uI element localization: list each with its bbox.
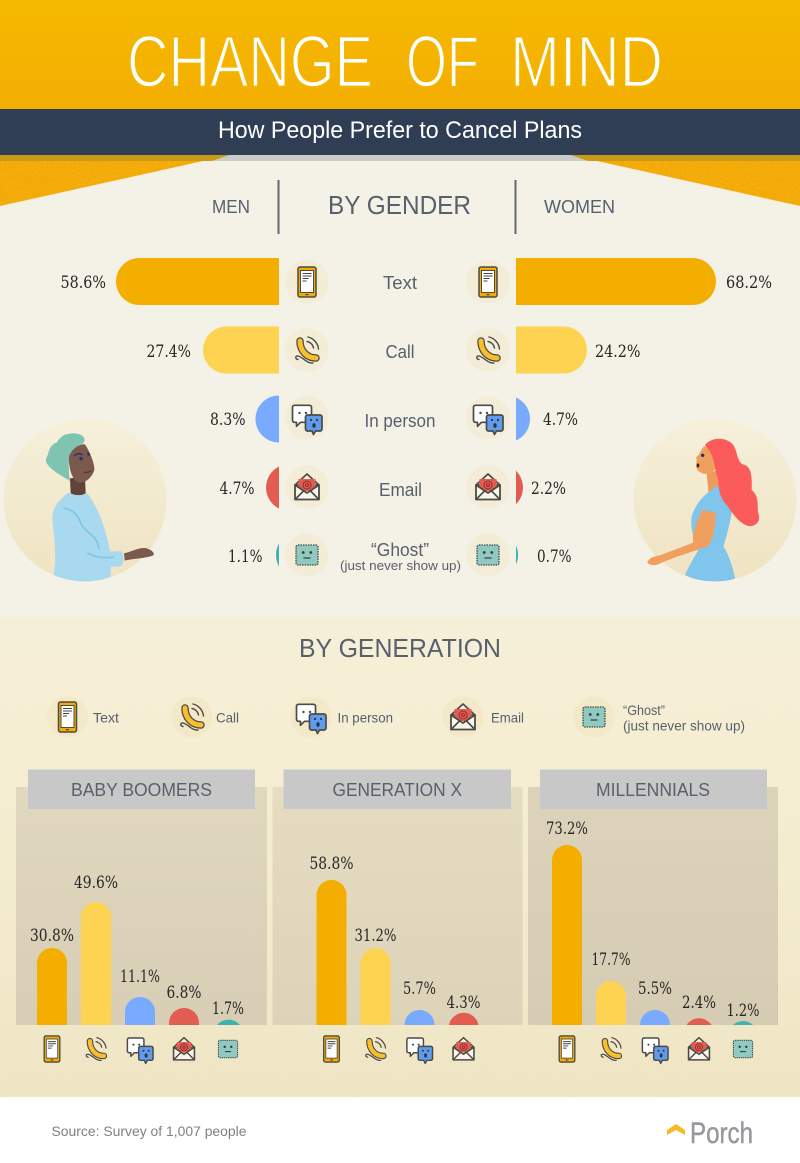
- icon: women text: [479, 267, 497, 297]
- band shadow: [0, 155, 800, 161]
- values: gen x: 4.3%: [446, 993, 480, 1013]
- icon: men text: [298, 267, 316, 297]
- illustration: man: [0, 418, 170, 585]
- bottom icons: millennials: [559, 1036, 753, 1063]
- legend: email: [442, 696, 524, 738]
- bar: men ghost: [276, 544, 279, 566]
- values: millennials: 2.4%: [682, 993, 716, 1013]
- values: millennials: [546, 819, 760, 1021]
- value: women in person: 4.7%: [543, 410, 578, 430]
- values: boomers: 1.7%: [212, 999, 244, 1019]
- tab: baby boomers: BABY BOOMERS: [71, 779, 212, 800]
- panel: baby boomers: [16, 770, 267, 1025]
- values: boomers: [30, 873, 244, 1019]
- value: women call: 24.2%: [595, 342, 640, 362]
- values: gen x: 5.7%: [403, 979, 436, 999]
- bar: women in person: [516, 398, 530, 440]
- tab: generation x: GENERATION X: [332, 779, 462, 800]
- divider right: [514, 180, 516, 234]
- value: men in person: 8.3%: [210, 410, 246, 430]
- legend: call: [172, 696, 239, 738]
- icon: women call: [477, 337, 500, 363]
- subtitle: How People Prefer to Cancel Plans: [218, 117, 582, 144]
- values: gen x: [310, 854, 480, 1013]
- men chart: [60, 258, 279, 567]
- bar: women text: [516, 258, 716, 305]
- header yellow band: [0, 0, 800, 109]
- value: women email: 2.2%: [531, 479, 566, 499]
- panel: generation x: [272, 770, 522, 1025]
- label: ghost: “Ghost”: [371, 540, 429, 560]
- label: email: Email: [379, 480, 422, 500]
- legend: call: Call: [216, 710, 239, 726]
- heading: by gender: BY GENDER: [328, 190, 471, 220]
- bar: millennials ghost: [733, 1021, 753, 1025]
- icon: men call: [296, 337, 318, 363]
- header left orange wedge: [0, 155, 230, 206]
- label: ghost: [340, 540, 461, 573]
- tab: millennials: MILLENNIALS: [596, 779, 710, 800]
- legend: text: [47, 696, 119, 738]
- logo: porch: Porch: [690, 1117, 753, 1150]
- section background: by generation: [0, 617, 800, 1097]
- bar: boomers in person: [125, 997, 155, 1025]
- divider left: [278, 180, 280, 234]
- legend: in person: [290, 696, 393, 738]
- bar: men call: [203, 326, 279, 374]
- values: boomers: 6.8%: [166, 983, 202, 1003]
- values: millennials: 73.2%: [546, 819, 588, 839]
- bar: gen x in person: [404, 1010, 434, 1025]
- bar: women call: [516, 326, 587, 374]
- bar: gen x text: [316, 880, 346, 1025]
- bar: women ghost: [516, 546, 518, 564]
- values: boomers: 11.1%: [120, 967, 160, 987]
- illustration: woman: [630, 418, 800, 585]
- icon: men email: [295, 474, 319, 500]
- values: millennials: 5.5%: [638, 979, 672, 999]
- bar: gen x email: [449, 1013, 478, 1025]
- footer: [0, 1097, 800, 1163]
- value: men text: 58.6%: [60, 273, 106, 293]
- value: men call: 27.4%: [146, 342, 191, 362]
- source note: Source: Survey of 1,007 people: [52, 1123, 247, 1139]
- values: gen x: 58.8%: [310, 854, 354, 874]
- legend: email: Email: [491, 710, 524, 726]
- gender icon discs: [285, 260, 510, 577]
- tab: millennials: [540, 770, 767, 809]
- panel: millennials: [528, 770, 778, 1025]
- header right orange wedge: [570, 155, 800, 206]
- legend: in person: In person: [338, 710, 393, 726]
- value: women text: 68.2%: [726, 273, 772, 293]
- bar: boomers email: [169, 1008, 199, 1025]
- heading: men: MEN: [212, 197, 250, 217]
- title: OF: [406, 22, 479, 102]
- bar: millennials text: [552, 845, 582, 1025]
- label: in person: In person: [364, 411, 436, 431]
- bar: millennials email: [686, 1018, 712, 1025]
- title: [127, 22, 663, 102]
- heading: women: WOMEN: [544, 197, 615, 217]
- icon: men in person: [292, 405, 322, 434]
- value: men email: 4.7%: [220, 479, 254, 499]
- logo: porch: [667, 1117, 753, 1150]
- legend: [47, 696, 745, 738]
- bar: men text: [116, 258, 279, 305]
- bar: men in person: [256, 396, 279, 442]
- values: gen x: 31.2%: [354, 926, 396, 946]
- legend: ghost: “Ghost”: [623, 702, 665, 718]
- values: boomers: 30.8%: [30, 926, 74, 946]
- bottom icons: generation x: [324, 1036, 474, 1063]
- legend: text: Text: [93, 710, 119, 726]
- value: women ghost: 0.7%: [537, 547, 572, 567]
- bar: millennials in person: [640, 1010, 670, 1025]
- bottom icons: baby boomers: [44, 1036, 238, 1063]
- bar: boomers call: [81, 902, 111, 1025]
- bar: gen x call: [360, 948, 390, 1025]
- label: ghost: (just never show up): [340, 558, 461, 573]
- heading: by generation: BY GENERATION: [299, 633, 501, 663]
- tab: generation x: [284, 770, 511, 809]
- bar: women email: [516, 471, 523, 504]
- icon: women email: [476, 474, 500, 500]
- bar: boomers text: [37, 948, 67, 1025]
- tab: baby boomers: [28, 770, 255, 809]
- icon: men ghost: [296, 545, 318, 565]
- values: millennials: 17.7%: [592, 950, 630, 970]
- women chart: [516, 258, 772, 567]
- wedge speckle: [0, 161, 800, 206]
- values: boomers: 49.6%: [74, 873, 118, 893]
- bar: men email: [266, 466, 279, 508]
- icon: women in person: [474, 405, 503, 434]
- title: CHANGE: [127, 22, 373, 102]
- legend: ghost: [574, 696, 745, 738]
- value: men ghost: 1.1%: [228, 547, 262, 567]
- title: MIND: [510, 22, 663, 102]
- icon: women ghost: [477, 545, 499, 565]
- label: text: Text: [383, 273, 417, 293]
- subtitle band: [0, 109, 800, 155]
- bar: millennials call: [596, 981, 626, 1025]
- bar: boomers ghost: [217, 1020, 240, 1025]
- label: call: Call: [386, 342, 414, 362]
- legend: ghost: (just never show up): [623, 718, 745, 734]
- values: millennials: 1.2%: [726, 1001, 760, 1021]
